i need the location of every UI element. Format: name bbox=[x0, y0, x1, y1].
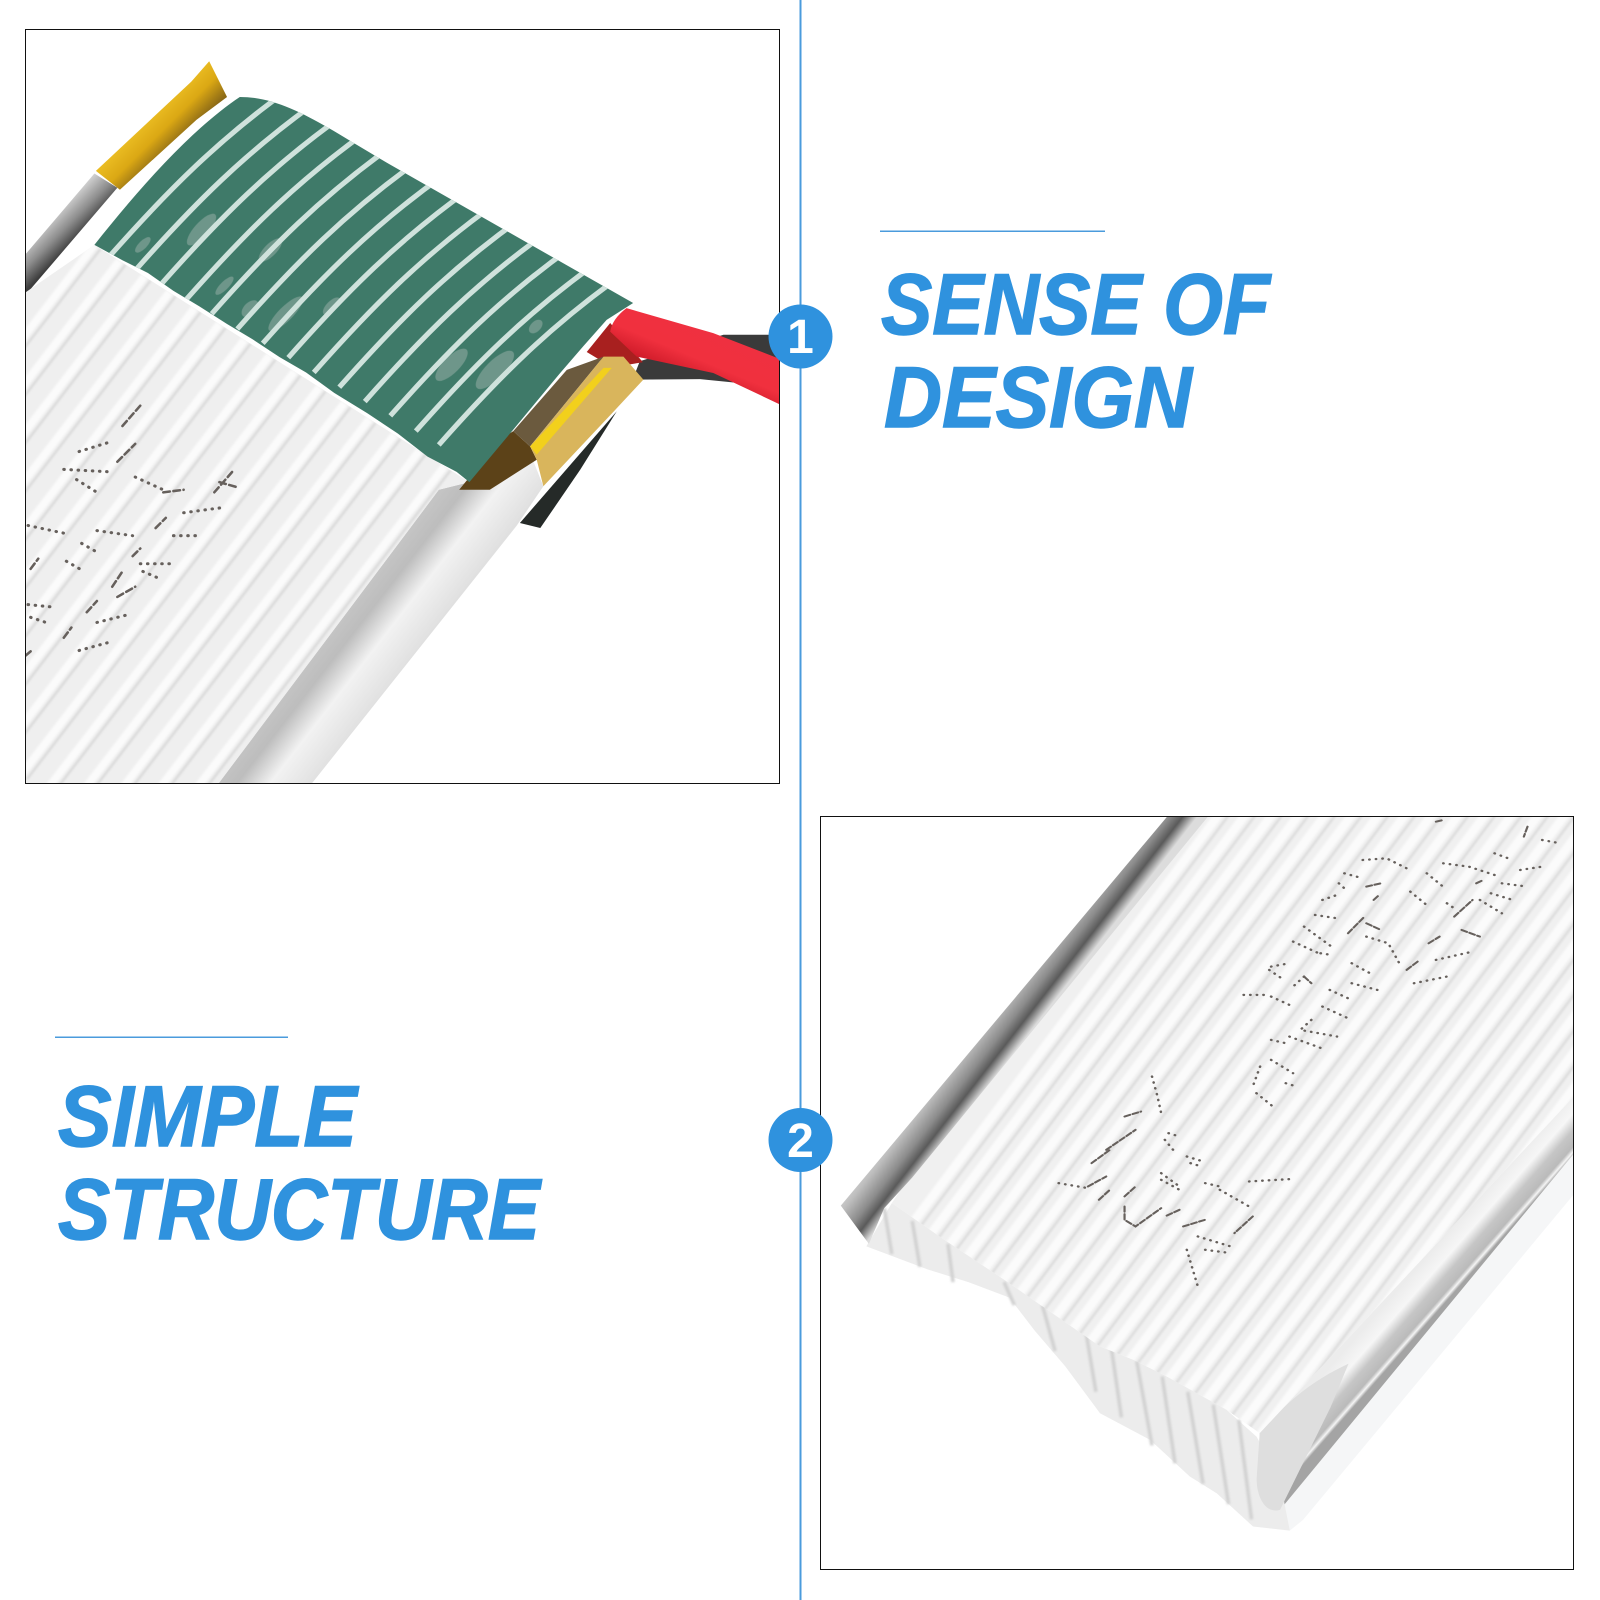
battery silver side bbox=[219, 462, 544, 783]
heading: sense of design: DESIGN bbox=[884, 350, 1194, 446]
heading rule 1 bbox=[880, 230, 1105, 232]
black tab bbox=[520, 411, 617, 528]
dark wire root bbox=[587, 323, 643, 367]
black wire bbox=[636, 334, 777, 382]
panel: battery bottom photo bbox=[840, 817, 1573, 1530]
battery silver side bbox=[1284, 1098, 1573, 1504]
battery end wrap bbox=[866, 1203, 1290, 1531]
vertical divider line bbox=[800, 0, 802, 1600]
panel frame 2 bbox=[820, 816, 1574, 1570]
star mark print bbox=[1059, 1077, 1289, 1286]
panel frame 1 bbox=[26, 30, 780, 784]
heading rule 2 bbox=[55, 1036, 288, 1038]
dark battery cavity bbox=[513, 357, 604, 446]
cavity amber glue bbox=[459, 431, 537, 490]
corner highlight bbox=[1257, 1364, 1348, 1511]
dotted print bbox=[1059, 820, 1560, 1286]
heading: sense of design bbox=[881, 257, 1272, 446]
number badge 2 bbox=[768, 1108, 832, 1172]
body stripes bbox=[912, 817, 1573, 1433]
heading: simple structure: SIMPLE bbox=[58, 1069, 359, 1165]
red wire bbox=[610, 308, 786, 407]
panel: battery top photo bbox=[26, 61, 779, 783]
left silver edge bbox=[26, 174, 118, 292]
tape stripes bbox=[110, 88, 620, 445]
number badge 2: 2 bbox=[787, 1115, 814, 1168]
battery body bbox=[892, 810, 1586, 1433]
tape highlights bbox=[133, 210, 545, 394]
green tape bbox=[94, 97, 633, 482]
number badge 1: 1 bbox=[787, 311, 814, 364]
body stripes bbox=[26, 246, 451, 783]
gold tab top left bbox=[96, 61, 227, 190]
outer silver flange bbox=[1285, 1156, 1573, 1530]
heading: simple structure bbox=[58, 1069, 542, 1258]
end folds bbox=[884, 1208, 1252, 1519]
heading: sense of design: SENSE OF bbox=[881, 257, 1272, 353]
number badge 1 bbox=[768, 304, 832, 368]
battery spec print bbox=[1244, 820, 1560, 1107]
dotted print bbox=[26, 406, 237, 656]
gold tab right bbox=[530, 357, 643, 486]
left silver edge bbox=[841, 816, 1208, 1244]
heading: simple structure: STRUCTURE bbox=[58, 1162, 542, 1258]
battery body bbox=[20, 245, 469, 816]
